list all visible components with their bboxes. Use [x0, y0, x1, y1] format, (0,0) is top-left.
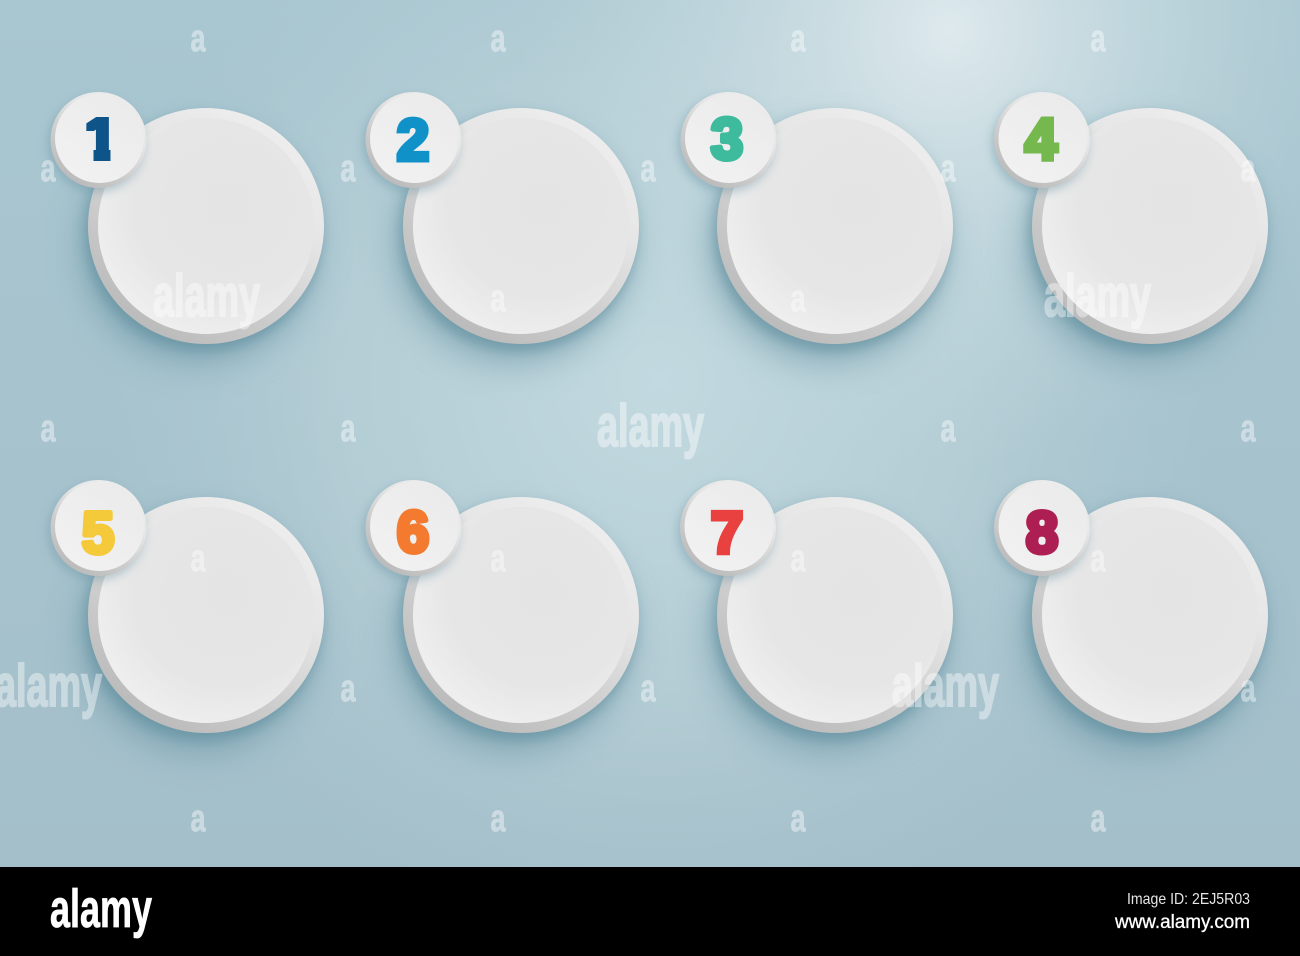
watermark: large logos: alamy [153, 263, 260, 329]
panel: circle 1 [48, 92, 324, 364]
watermark: small letters: a [640, 148, 656, 190]
watermark: large logos [0, 263, 1151, 719]
watermark: small letters: a [1090, 538, 1106, 580]
footer bar [0, 867, 1300, 956]
number 5: 5 [82, 501, 114, 566]
watermark: small letters: a [1240, 148, 1256, 190]
watermark: small letters: a [490, 798, 506, 840]
watermark: large logos: alamy [1044, 263, 1151, 329]
panel: circle 5 [48, 480, 324, 753]
watermark: small letters: a [1240, 408, 1256, 450]
watermark: small letters: a [790, 18, 806, 60]
panel: circle 2 [363, 92, 639, 364]
watermark: small letters: a [340, 408, 356, 450]
image id: Image ID: 2EJ5R03 [1127, 891, 1250, 908]
watermark: large logos: alamy [0, 653, 102, 719]
number 4: 4 [1025, 107, 1057, 172]
footer logo: alamy [50, 879, 152, 939]
watermark: large logos: alamy [892, 653, 999, 719]
number 8: 8 [1026, 500, 1058, 566]
watermark: small letters: a [490, 278, 506, 320]
website: www.alamy.com [1114, 912, 1250, 933]
watermark: small letters: a [640, 668, 656, 710]
watermark: small letters: a [190, 798, 206, 840]
number 6: 6 [397, 500, 429, 565]
watermark: small letters: a [940, 148, 956, 190]
watermark: small letters: a [190, 18, 206, 60]
watermark: small letters: a [790, 538, 806, 580]
watermark: small letters: a [490, 538, 506, 580]
watermark: small letters: a [940, 408, 956, 450]
watermark: small letters: a [340, 668, 356, 710]
watermark: small letters: a [40, 148, 56, 190]
watermark: small letters: a [1240, 668, 1256, 710]
watermark: large logos: alamy [597, 393, 704, 459]
panel: circle 4 [992, 92, 1268, 364]
watermark: small letters: a [40, 408, 56, 450]
panel: circle 7 [678, 480, 953, 753]
number 1: 1 [85, 106, 117, 172]
watermark: small letters: a [790, 278, 806, 320]
panel: circle 6 [363, 480, 639, 753]
watermark: small letters: a [340, 148, 356, 190]
panel: circle 3 [678, 92, 953, 364]
watermark: small letters: a [1090, 798, 1106, 840]
watermark: small letters: a [1090, 18, 1106, 60]
watermark: small letters: a [790, 798, 806, 840]
panel: circle 8 [992, 480, 1268, 753]
watermark: small letters: a [190, 538, 206, 580]
number 2: 2 [397, 108, 429, 173]
number 7: 7 [711, 500, 743, 566]
watermark: small letters: a [490, 18, 506, 60]
number 3: 3 [711, 107, 743, 172]
